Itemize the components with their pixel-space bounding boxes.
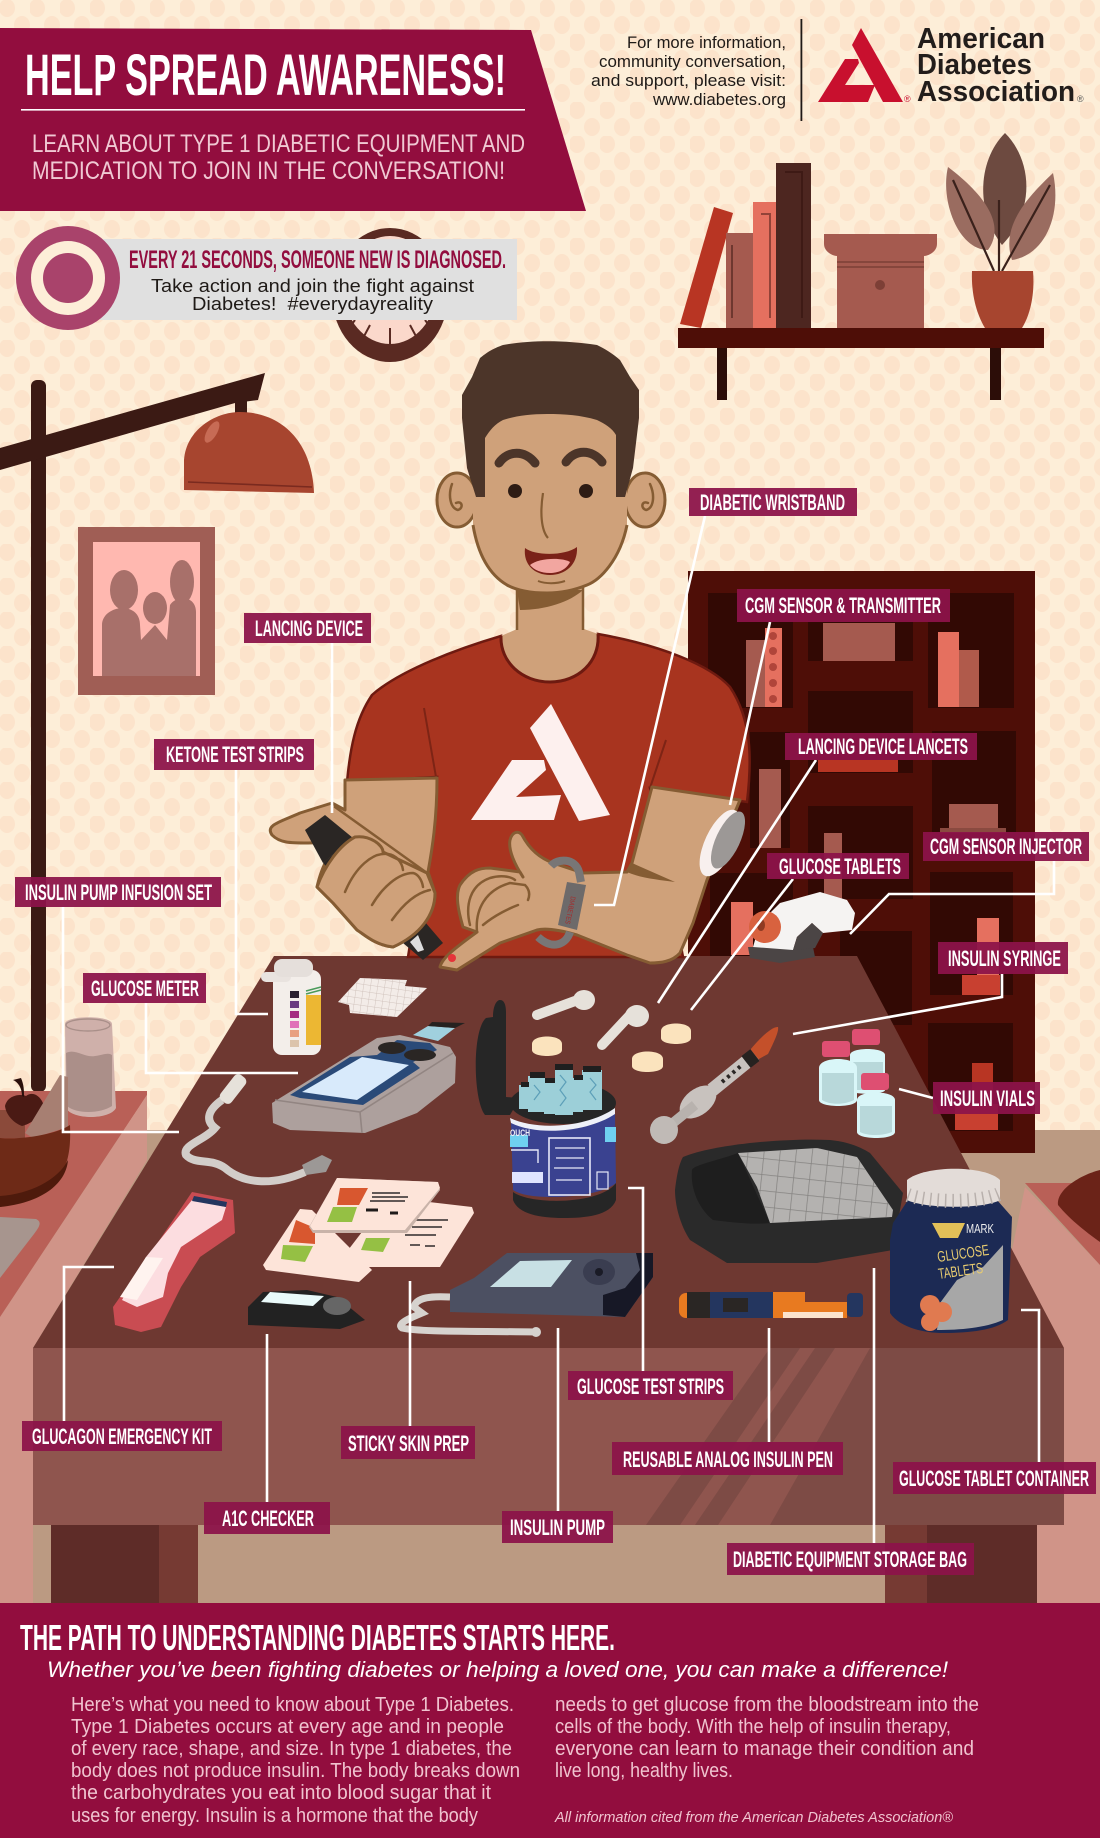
family picture frame — [78, 527, 215, 695]
bottle label text: TABLETS — [937, 1260, 984, 1283]
call to action — [151, 276, 474, 314]
body text column 2: needs to get glucose from the bloodstream into the — [555, 1694, 979, 1716]
label: reusable analog insulin pen — [612, 1442, 843, 1475]
folded tray — [0, 1217, 40, 1278]
body text column 1: uses for energy. Insulin is a hormone that the body — [71, 1805, 478, 1827]
contact information — [591, 33, 786, 109]
label: glucagon emergency kit: GLUCAGON EMERGENCY KIT — [32, 1424, 212, 1449]
contact information: and support, please visit: — [591, 71, 786, 90]
label: insulin vials — [933, 1082, 1040, 1114]
bookcase — [688, 571, 1035, 1153]
label: a1c checker — [204, 1502, 330, 1534]
American Diabetes Association logo: Diabetes — [917, 49, 1032, 81]
bottle label text: MARK — [966, 1221, 994, 1236]
side cabinet left with fruit bowl — [0, 1017, 147, 1603]
body text column 2: cells of the body. With the help of insulin therapy, — [555, 1716, 951, 1738]
neck — [501, 580, 598, 682]
label: insulin syringe — [938, 942, 1068, 974]
panel subheading: Whether you’ve been fighting diabetes or helping a loved one, you can make a difference! — [47, 1657, 948, 1682]
label: lancing device — [244, 613, 371, 643]
reusable analog insulin pen — [679, 1292, 863, 1318]
contact information: www.diabetes.org — [652, 90, 786, 109]
nose — [541, 493, 548, 538]
label: insulin pump — [502, 1511, 613, 1543]
lancets — [537, 990, 649, 1045]
label: a1c checker: A1C CHECKER — [222, 1506, 314, 1531]
body text column 2: everyone can learn to manage their condition and — [555, 1738, 974, 1760]
citation: All information cited from the American Diabetes Association® — [554, 1809, 954, 1826]
glucose test strips jar with lid — [476, 1000, 616, 1218]
insulin pump — [401, 1253, 653, 1337]
body text column 1: the carbohydrates you eat into blood sugar that it — [71, 1782, 491, 1804]
man — [270, 341, 752, 970]
label: lancing device: LANCING DEVICE — [255, 616, 363, 641]
decorative box — [824, 234, 937, 328]
label: ketone test strips: KETONE TEST STRIPS — [166, 742, 304, 767]
label: cgm sensor and transmitter — [737, 589, 950, 622]
bottle label text — [936, 1221, 994, 1283]
glucose tablet container — [890, 1169, 1012, 1333]
banner subtitle: LEARN ABOUT TYPE 1 DIABETIC EQUIPMENT AND — [32, 130, 525, 158]
insulin syringe — [650, 1027, 778, 1144]
face — [473, 410, 627, 593]
body text column 1 — [71, 1694, 520, 1827]
lancing device — [305, 815, 443, 960]
CGM sensor — [691, 804, 752, 882]
contact information: For more information, — [627, 33, 786, 52]
call to action: Diabetes! #everydayreality — [192, 294, 433, 314]
label: lancing device lancets — [785, 733, 977, 760]
body text column 1: body does not produce insulin. The body breaks down — [71, 1760, 520, 1782]
cgm sensor injector — [748, 892, 855, 963]
body text column 1: of every race, shape, and size. In type 1 diabetes, the — [71, 1738, 512, 1760]
left arm with thumb — [270, 778, 437, 947]
American Diabetes Association logo: ® — [904, 94, 911, 104]
label: glucose tablets — [767, 853, 909, 879]
label: diabetic equipment storage bag — [727, 1543, 974, 1575]
contact information: community conversation, — [599, 52, 786, 71]
fruit bowl — [0, 1075, 70, 1207]
label: sticky skin prep — [341, 1426, 475, 1459]
body text column 1: Type 1 Diabetes occurs at every age and in people — [71, 1716, 504, 1738]
American Diabetes Association logo: Association — [917, 76, 1075, 108]
label: insulin pump infusion set: INSULIN PUMP INFUSION SET — [25, 880, 212, 905]
label: cgm sensor and transmitter: CGM SENSOR & TRANSMITTER — [745, 593, 941, 618]
mouth — [525, 547, 577, 575]
American Diabetes Association logo: American — [917, 23, 1045, 55]
sticky skin prep packets — [263, 1178, 474, 1282]
panel heading: THE PATH TO UNDERSTANDING DIABETES STARTS HERE. — [20, 1617, 615, 1658]
hair — [462, 341, 639, 497]
banner subtitle — [32, 130, 525, 185]
label: ketone test strips — [154, 739, 314, 770]
potted plant — [946, 133, 1055, 328]
t-shirt — [347, 634, 750, 957]
right arm with pointing hand — [440, 787, 740, 970]
header banner — [0, 28, 586, 211]
icon: wall clock — [332, 228, 448, 362]
body text column 2: live long, healthy lives. — [555, 1760, 733, 1782]
banner subtitle: MEDICATION TO JOIN IN THE CONVERSATION! — [32, 157, 505, 185]
books — [680, 163, 811, 328]
label: diabetic wristband: DIABETIC WRISTBAND — [700, 490, 845, 515]
side cabinet right — [1012, 1170, 1100, 1603]
eyebrows — [499, 452, 602, 463]
label: insulin pump infusion set — [15, 877, 221, 907]
label: glucose meter — [83, 973, 206, 1003]
body text column 2 — [555, 1694, 979, 1782]
ears — [437, 473, 665, 527]
American Diabetes Association logo — [818, 23, 1084, 108]
statistic headline: EVERY 21 SECONDS, SOMEONE NEW IS DIAGNOSED. — [129, 246, 506, 274]
label: reusable analog insulin pen: REUSABLE ANALOG INSULIN PEN — [623, 1447, 833, 1472]
left fist — [317, 807, 435, 947]
label: lancing device lancets: LANCING DEVICE LANCETS — [798, 734, 968, 759]
glucagon emergency kit — [113, 1192, 235, 1332]
eyes — [508, 484, 593, 498]
label: diabetic wristband — [689, 488, 857, 516]
jar label text: OUCH — [510, 1128, 530, 1138]
drinking glass — [65, 1017, 116, 1117]
callout: every 21 seconds — [16, 226, 517, 330]
ketone test strips bottle — [261, 959, 321, 1055]
body text column 1: Here’s what you need to know about Type 1 Diabetes. — [71, 1694, 514, 1716]
panel: understanding diabetes — [0, 1603, 1100, 1838]
call to action: Take action and join the fight against — [151, 276, 474, 296]
wall shelf — [678, 133, 1055, 400]
diabetic wristband: DIABETES — [563, 896, 576, 925]
label: glucose meter: GLUCOSE METER — [91, 976, 199, 1001]
bottle label text: GLUCOSE — [936, 1242, 990, 1266]
diabetic equipment storage bag — [675, 1140, 903, 1263]
label: sticky skin prep: STICKY SKIN PREP — [348, 1431, 469, 1456]
label: glucose tablets: GLUCOSE TABLETS — [779, 854, 901, 879]
target icon — [16, 226, 120, 330]
label: insulin vials: INSULIN VIALS — [940, 1086, 1035, 1111]
American Diabetes Association logo: ® — [1077, 94, 1084, 104]
glucose meter — [272, 1022, 465, 1133]
headline: HELP SPREAD AWARENESS! — [25, 43, 506, 108]
label: glucose test strips: GLUCOSE TEST STRIPS — [577, 1374, 724, 1399]
label: insulin pump: INSULIN PUMP — [510, 1515, 605, 1540]
glucose tablets — [532, 1024, 691, 1072]
table — [33, 956, 1064, 1603]
equipment on table — [113, 892, 1012, 1337]
sticky skin prep gauze — [338, 978, 427, 1017]
diabetic wristband — [538, 861, 586, 945]
insulin vials — [819, 1029, 895, 1138]
leader lines — [63, 516, 1054, 1543]
a1c checker — [248, 1290, 365, 1329]
insulin pump infusion set — [186, 1072, 332, 1181]
floor lamp — [0, 373, 314, 1092]
label: glucagon emergency kit — [22, 1421, 222, 1451]
label: glucose test strips — [568, 1371, 733, 1400]
lamp shade — [184, 412, 314, 493]
